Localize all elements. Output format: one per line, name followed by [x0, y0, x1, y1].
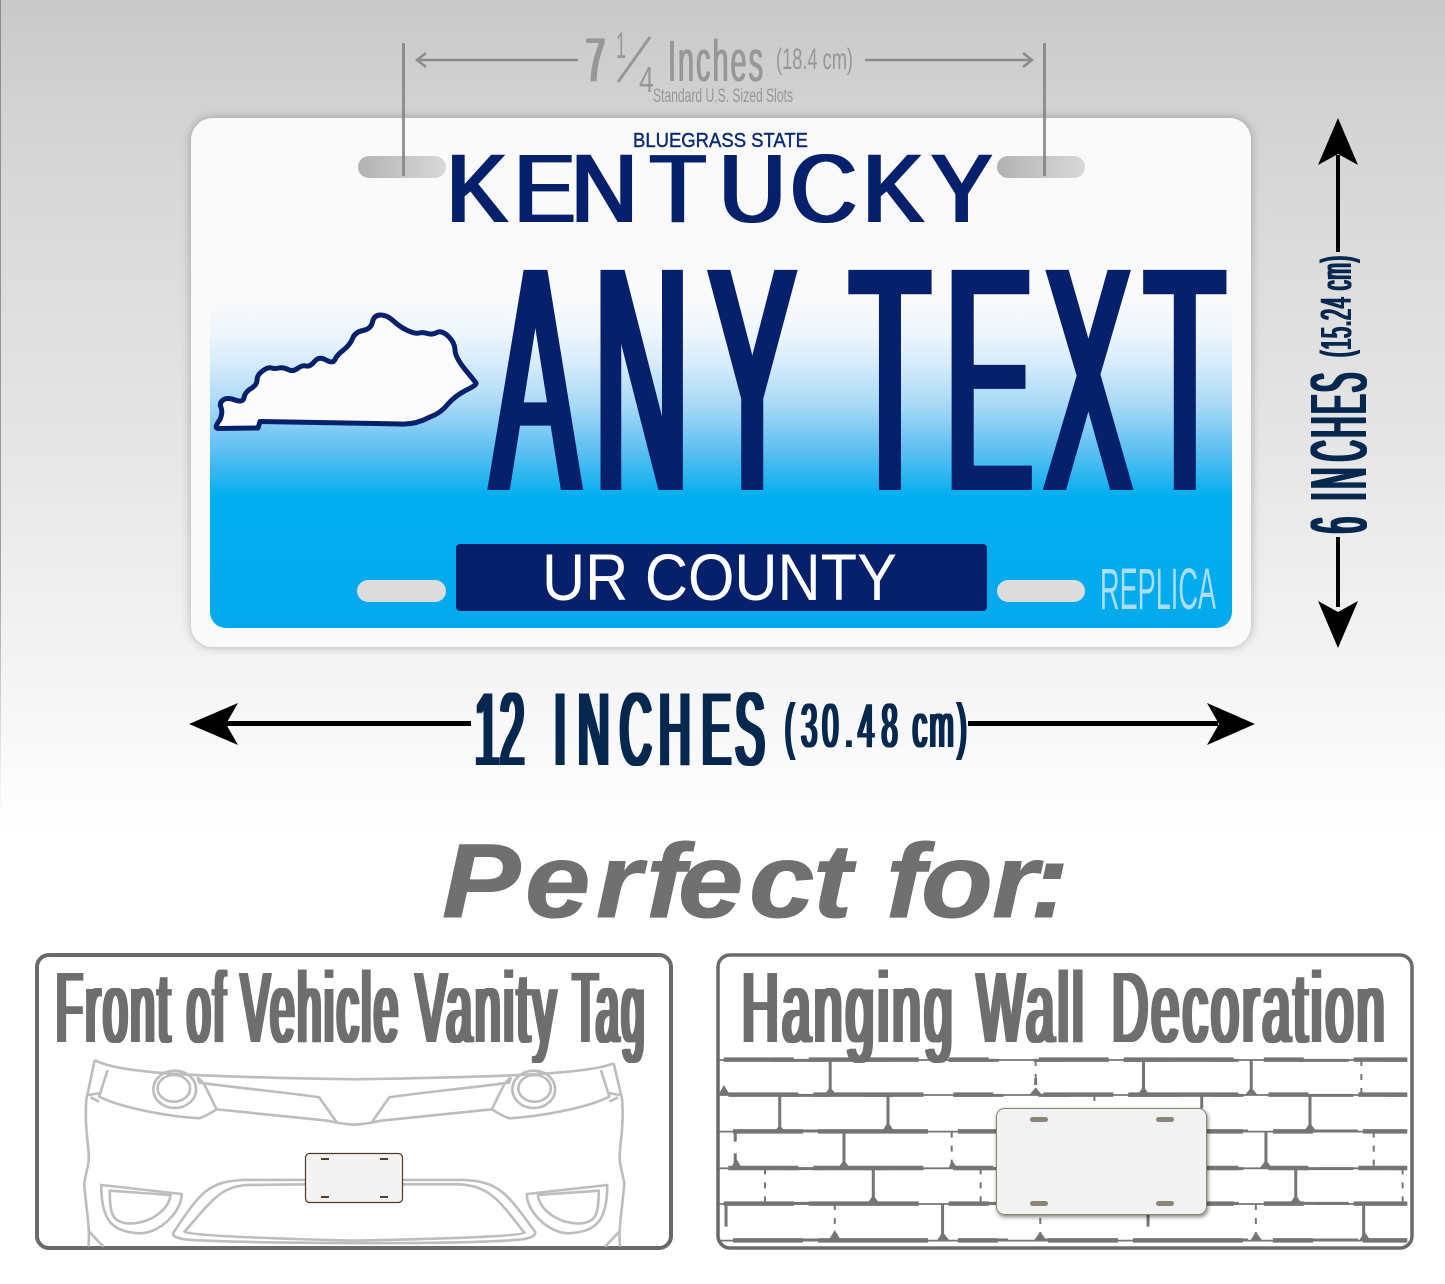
panel title: Front [56, 952, 173, 1064]
brick wall pattern [718, 1060, 1412, 1241]
width metric label: (30.48 cm) [785, 692, 967, 761]
height arrow [1318, 118, 1358, 648]
slot spacing dimension [402, 25, 1046, 176]
blue gradient field [210, 300, 1232, 628]
height label: 6 INCHES [1294, 373, 1383, 533]
car front line drawing [84, 1060, 624, 1247]
slot spacing arrows [417, 53, 1032, 67]
panel title [56, 952, 647, 1064]
mounting slots [357, 156, 1085, 602]
slot spacing label: (18.4 cm) [776, 43, 853, 76]
height dimension: (15.24 cm) [1312, 255, 1361, 357]
width label: 12 INCHES [475, 671, 765, 787]
state name: KENTUCKY [447, 135, 992, 244]
slot spacing label: 1 [616, 25, 626, 66]
small plate on car [306, 1154, 402, 1202]
width arrow [189, 703, 1255, 745]
panel title: Vehicle [241, 952, 401, 1064]
slot spacing label [586, 25, 853, 107]
panel title: of [187, 952, 228, 1064]
panel frame [37, 955, 671, 1248]
height dimension [1294, 118, 1383, 648]
slot spacing label: Standard U.S. Sized Slots [653, 86, 793, 107]
state outline icon [216, 315, 476, 428]
blank plate on wall [996, 1108, 1206, 1214]
panel title [742, 952, 1388, 1064]
county label: UR COUNTY [542, 540, 897, 614]
heading: Perfect for: [442, 822, 1069, 940]
license plate [191, 118, 1251, 647]
county bar [456, 544, 987, 611]
plate text: any text: ANY TEXT [492, 200, 1224, 558]
slot guide lines [402, 43, 1046, 176]
panel frame [718, 955, 1412, 1248]
panel title: Hanging [742, 952, 956, 1064]
plate body [191, 118, 1251, 647]
panel: front of vehicle: Tag [573, 952, 647, 1064]
panel title: Wall [977, 952, 1087, 1064]
slot spacing label: 4 [639, 59, 654, 100]
panel title: Vanity [416, 952, 559, 1064]
panel: wall decoration [718, 952, 1412, 1248]
left edge line [0, 0, 1, 820]
slot spacing label: Inches [668, 29, 765, 94]
panel: front of vehicle [37, 952, 671, 1248]
width dimension [189, 671, 1255, 787]
slot spacing label: 7 [586, 26, 605, 95]
bluegrass state tagline: BLUEGRASS STATE [633, 130, 808, 152]
license plate: REPLICA [1100, 557, 1216, 622]
